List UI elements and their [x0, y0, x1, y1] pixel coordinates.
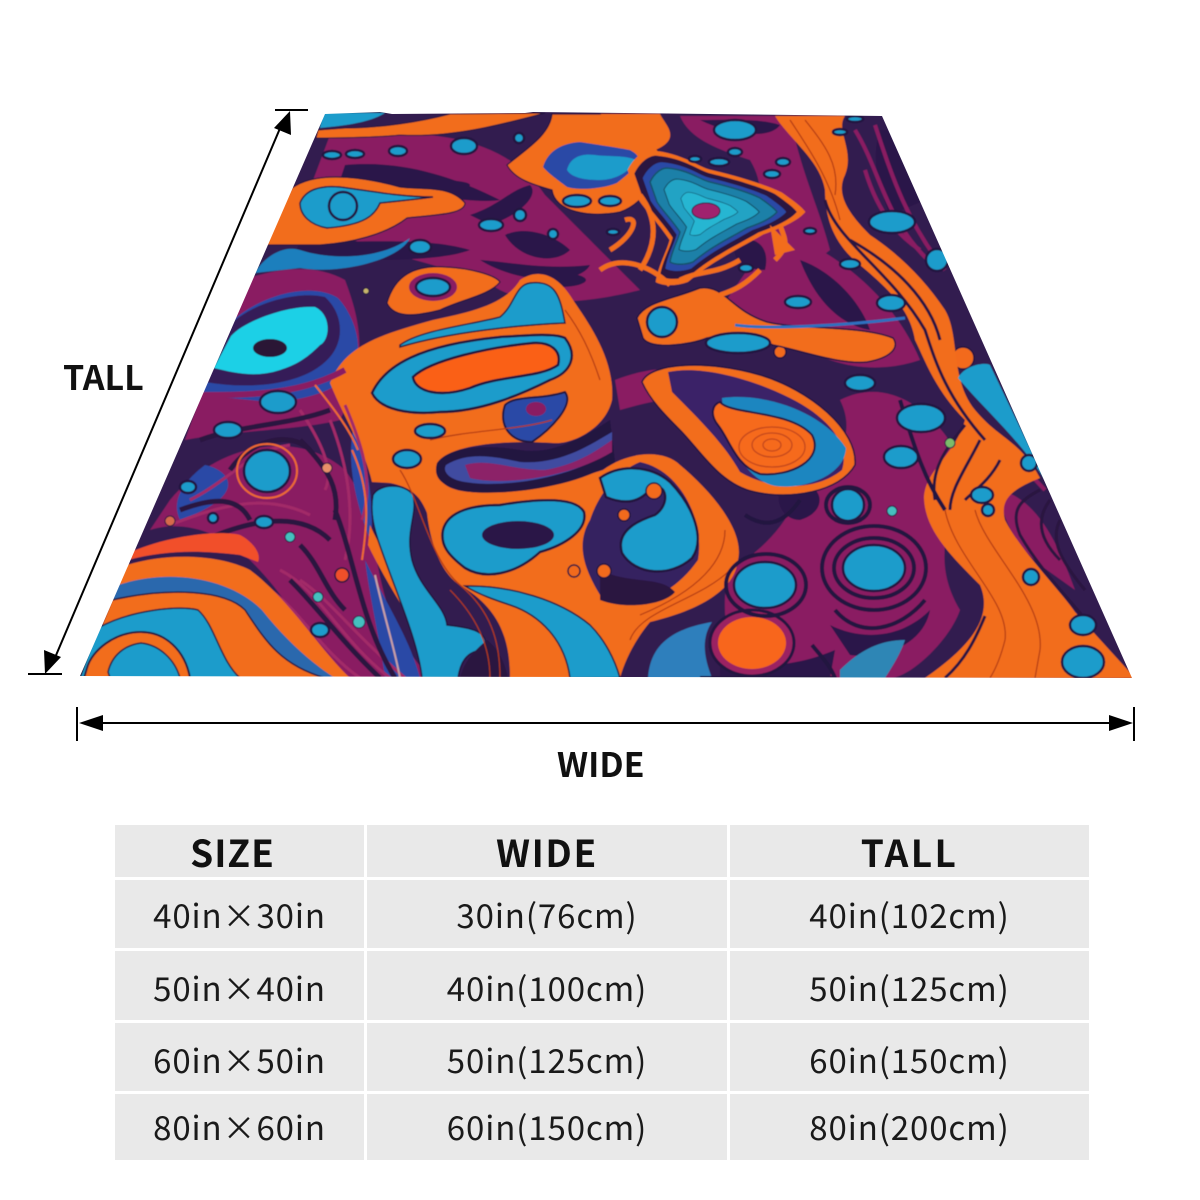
row 4 tall: [730, 1094, 1089, 1160]
red contour lines in river: [400, 120, 1040, 678]
row 1 wide: [367, 880, 727, 948]
cyan pool surround and pool: [205, 295, 340, 386]
row 1 size: [115, 880, 364, 948]
star surround: orange, dark, blue, contours: [628, 150, 805, 285]
top orange ring with blue pool: [507, 114, 662, 214]
stripes of magenta and dark in left-middle: [170, 405, 405, 678]
dark mottling over magenta: [295, 120, 930, 678]
label: WIDE: WIDE: [557, 738, 645, 787]
dots: [180, 116, 1104, 678]
orange core: [413, 343, 559, 393]
dark rings: [726, 400, 945, 628]
wide dimension arrow: [77, 707, 1134, 741]
royal blob with magenta eye: [503, 392, 567, 442]
row 2 tall: [730, 951, 1089, 1020]
orange disc with magenta ring: [710, 610, 794, 676]
dark streaks in right river: [825, 200, 1090, 678]
header: WIDE: WIDE: [496, 824, 598, 878]
header: WIDE: [367, 825, 727, 877]
row 3 size: 60in×50in: [153, 1034, 326, 1082]
row 3 wide: [367, 1023, 727, 1091]
row 4 wide: 60in(150cm): [447, 1102, 647, 1150]
lower dark channel: [460, 640, 508, 678]
top left blue and orange: [316, 113, 545, 138]
header: TALL: TALL: [861, 824, 958, 878]
teal and accent specks: [165, 288, 955, 628]
band below cyan pool: [200, 370, 345, 395]
right swirl: [642, 365, 855, 495]
row 2 wide: [367, 951, 727, 1020]
tall dimension arrow: [28, 110, 308, 674]
header: SIZE: SIZE: [190, 824, 275, 878]
left eye blue band: [255, 238, 410, 273]
row 4 size: [115, 1094, 364, 1160]
orange squiggles below star: [600, 195, 785, 295]
label: TALL: TALL: [63, 351, 144, 400]
top blue pool: [400, 283, 565, 347]
dark spiral around right pool: [583, 462, 699, 602]
row 2 size: 50in×40in: [153, 963, 326, 1011]
row 3 tall: 60in(150cm): [809, 1034, 1010, 1082]
magenta streaks on right edge: [855, 125, 1045, 490]
header: TALL: [730, 825, 1089, 877]
swirl core: [713, 402, 815, 474]
blue ring around orange core: [372, 335, 572, 413]
row 2 wide: 40in(100cm): [447, 963, 647, 1011]
left blue river: [372, 486, 486, 678]
magenta band: [436, 420, 615, 493]
row 4 tall: 80in(200cm): [809, 1102, 1010, 1150]
bottom left stacked bands: [80, 533, 350, 678]
right orange river: [775, 116, 1135, 678]
blue corner on right edge: [958, 364, 1045, 480]
row 2 tall: 50in(125cm): [809, 963, 1010, 1011]
row 3 wide: 50in(125cm): [447, 1034, 647, 1082]
row 4 size: 80in×60in: [153, 1102, 326, 1150]
row 1 tall: [730, 880, 1089, 948]
blue swirl bands: [177, 291, 905, 678]
blue pool with dark ellipse: [442, 500, 584, 574]
lower blue river: [465, 586, 620, 678]
star centre: [692, 203, 720, 219]
magenta patches: [150, 116, 1075, 678]
ring around upper-left oval: [387, 267, 500, 315]
row 2 size: [115, 951, 364, 1020]
central orange river: [330, 274, 739, 678]
header: SIZE: [115, 825, 364, 877]
blanket illustration with psychedelic swirl pattern: [28, 109, 1135, 741]
row 3 tall: [730, 1023, 1089, 1091]
row 1 wide: 30in(76cm): [456, 890, 638, 938]
row 4 wide: [367, 1094, 727, 1160]
right blue pool: [600, 468, 698, 571]
left eye orange shape: [262, 177, 465, 245]
row 1 size: 40in×30in: [153, 890, 326, 938]
row 3 size: [115, 1023, 364, 1091]
middle orange band: [637, 288, 895, 362]
row 1 tall: 40in(102cm): [809, 890, 1010, 938]
size table: [115, 824, 1089, 1160]
orange accent dots: [335, 346, 974, 582]
